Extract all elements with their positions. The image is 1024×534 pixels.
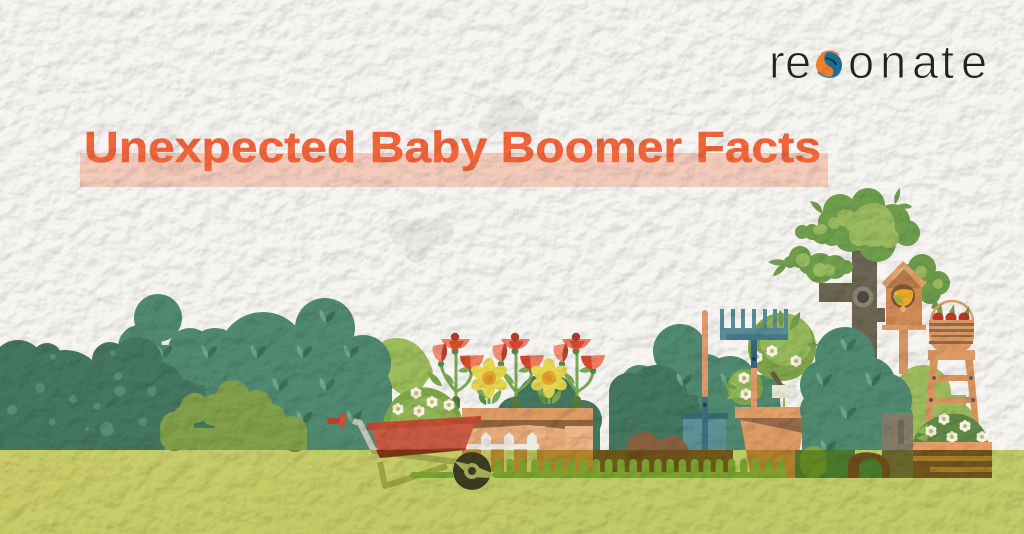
flower pot — [740, 418, 805, 478]
leaf marks — [677, 373, 692, 386]
raised bed with fence — [462, 408, 593, 472]
round shrub with daisies — [383, 371, 463, 450]
tree — [768, 188, 950, 360]
birdhouse — [882, 261, 926, 374]
light bush — [895, 365, 976, 450]
stump and roots — [882, 413, 946, 478]
front dark bush left — [0, 337, 220, 450]
ground — [0, 450, 1024, 534]
right bush — [800, 327, 912, 453]
grip — [327, 418, 345, 424]
flowers — [433, 333, 605, 410]
logo wordmark: reonate — [769, 35, 987, 88]
picket fence — [466, 432, 539, 472]
logo icon — [816, 51, 842, 78]
wheelbarrow — [327, 413, 481, 486]
background bushes right of flowers — [497, 324, 976, 450]
shovel handle — [702, 310, 708, 398]
wheel — [453, 452, 492, 490]
title: Unexpected Baby Boomer Facts — [84, 123, 821, 172]
brown fence band — [593, 450, 733, 472]
ground-tinted backgrounds for foreground items — [593, 413, 946, 478]
basket body — [929, 320, 974, 350]
planter with flowers — [913, 413, 992, 478]
ladder — [925, 350, 979, 425]
branch foliage — [768, 246, 853, 283]
basket on ladder — [925, 301, 979, 425]
trunk hole — [852, 286, 874, 308]
light green bush behind left hedge — [375, 338, 433, 402]
flower mound — [913, 414, 988, 442]
canopy highlights — [813, 203, 899, 248]
under-ground bushes — [795, 450, 855, 478]
post — [899, 329, 908, 374]
grass fringe — [410, 459, 787, 478]
dirt mounds — [626, 432, 662, 468]
dark mid bushes — [497, 365, 702, 450]
entrance — [891, 284, 915, 308]
bed posts — [462, 450, 593, 472]
plant label — [783, 384, 785, 408]
potted shrub and rake — [720, 309, 818, 478]
olive bush — [160, 380, 307, 452]
main canopy — [795, 188, 920, 262]
bed — [462, 408, 593, 472]
faint cloud shapes — [143, 95, 539, 263]
shovel — [680, 310, 728, 469]
basket handle — [931, 301, 973, 322]
apples — [937, 303, 969, 316]
logo: resonate — [769, 35, 987, 88]
tray — [371, 421, 476, 458]
foliage behind birdhouse — [903, 254, 950, 312]
planter boards — [913, 442, 992, 450]
bird — [894, 289, 913, 306]
frame — [353, 421, 457, 462]
title highlight band — [80, 153, 828, 187]
leaf marks — [157, 345, 172, 358]
red flowers — [433, 333, 484, 410]
trunk — [819, 250, 885, 360]
back bush left — [118, 294, 392, 450]
shovel blade — [683, 419, 726, 467]
rake — [720, 309, 788, 369]
bubbles — [7, 350, 157, 436]
mid bushes — [620, 324, 781, 450]
shrub — [748, 313, 816, 381]
body — [886, 280, 922, 326]
daffodils — [469, 358, 509, 405]
